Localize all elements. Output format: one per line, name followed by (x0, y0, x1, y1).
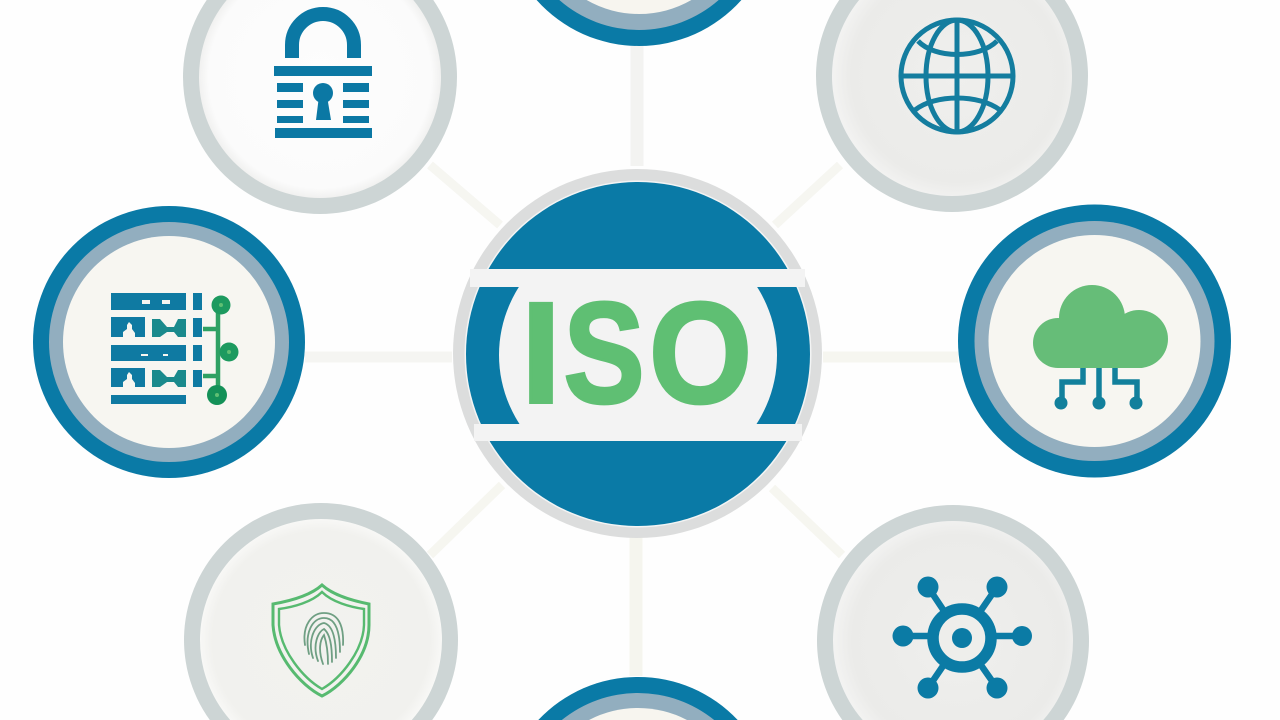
central ISO badge (453, 169, 822, 538)
node: bottom center (cropped) (538, 677, 738, 720)
node: network hub (817, 505, 1089, 720)
icon: server rack with circuit (111, 293, 238, 405)
icon: globe (901, 20, 1013, 132)
node: globe (816, 0, 1088, 212)
ISO wordmark: O (649, 273, 752, 434)
node: cloud (958, 204, 1231, 478)
node: shield (184, 503, 458, 720)
icon: padlock (274, 14, 372, 138)
node: server rack (33, 206, 305, 478)
connector lines (305, 46, 958, 676)
ISO wordmark (521, 272, 752, 434)
node: padlock (183, 0, 457, 214)
icon: network hub (892, 576, 1032, 698)
node: top center (cropped) (537, 0, 741, 46)
icon: shield with fingerprint (273, 585, 369, 696)
ISO wordmark: I (521, 272, 561, 434)
icon: cloud with circuit (1033, 285, 1168, 410)
ISO wordmark: S (564, 273, 645, 434)
